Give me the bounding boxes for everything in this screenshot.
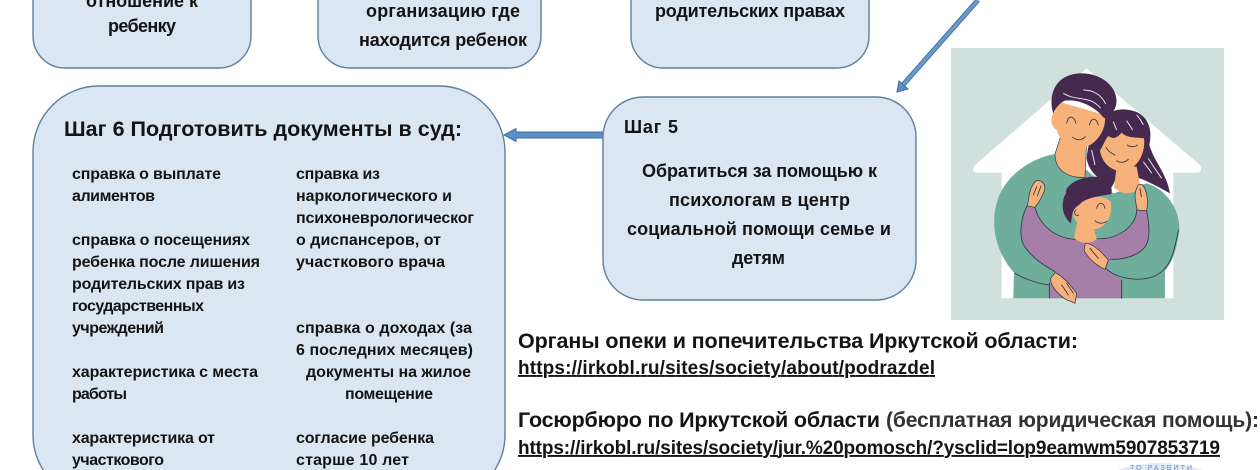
text block: right document list: справка из — [296, 166, 380, 183]
panel: top middle step box: организацию где — [366, 1, 520, 21]
arrow: step 5 to step 6 — [504, 128, 603, 142]
text block: left document list: алиментов — [72, 188, 155, 205]
text block: guardianship authorities: https://irkobl.ru/sites/society/about/podrazdel — [518, 358, 935, 379]
panel: top left step box: ребенку — [108, 16, 176, 36]
panel: step 5: Обратиться за помощью к — [642, 161, 878, 181]
panel: top middle step box — [318, 0, 541, 68]
icon: house — [973, 68, 1201, 298]
text block: left document list: родительских прав из — [72, 276, 245, 293]
figure: child shirt — [1021, 207, 1149, 298]
text block: left document list: ребенка после лишения — [72, 254, 260, 271]
heading: step 6: Шаг 6 Подготовить документы в суд: — [64, 117, 462, 141]
stamp: partially cropped seal — [1118, 463, 1202, 470]
text block: right document list: документы на жилое — [306, 364, 471, 381]
text block: left document list: участкового — [72, 452, 164, 469]
text block: state legal bureau: https://irkobl.ru/sites/society/jur.%20pomosch/?ysclid=lop9eamwm5907853719 — [518, 438, 1220, 459]
panel: top left step box — [33, 0, 251, 68]
text block: right document list — [296, 166, 474, 469]
figure: mother neck — [1114, 167, 1140, 193]
text block: state legal bureau: Госюрбюро по Иркутской области — [518, 408, 880, 432]
panel: top right step box: родительских правах — [655, 1, 845, 21]
text block: right document list: согласие ребенка — [296, 430, 434, 447]
text block: state legal bureau — [518, 408, 1259, 459]
text block: left document list: учреждений — [72, 320, 164, 337]
text block: guardianship authorities — [518, 329, 1078, 379]
panel: step 5 — [603, 97, 916, 300]
text block: left document list: справка о выплате — [72, 166, 221, 183]
panel: step 6 documents — [33, 86, 505, 470]
text block: left document list: характеристика от — [72, 430, 215, 447]
illustration: family in a house — [951, 48, 1224, 320]
figure: father neck — [1055, 138, 1087, 177]
text block: right document list: справка о доходах (за — [296, 320, 472, 337]
figure: mother hair — [1087, 109, 1170, 193]
panel: step 5: социальной помощи семье и — [627, 219, 891, 239]
text block: left document list: справка о посещениях — [72, 232, 250, 249]
text block: guardianship authorities: Органы опеки и попечительства Иркутской области: — [518, 329, 1078, 353]
figure: father face — [1051, 102, 1105, 148]
text block: left document list: государственных — [72, 298, 204, 315]
figure: hands — [1027, 181, 1045, 207]
figure: father body — [994, 154, 1179, 298]
text block: left document list: работы — [72, 386, 127, 403]
panel: step 5: детям — [732, 248, 785, 268]
text block: right document list: психоневрологическог — [296, 210, 474, 227]
text block: right document list: старше 10 лет — [296, 452, 409, 469]
text block: right document list: помещение — [345, 386, 433, 403]
panel: top middle step box: находится ребенок — [359, 30, 528, 50]
panel: step 5: психологам в центр — [669, 190, 850, 210]
text block: state legal bureau: (бесплатная юридическая помощь): — [886, 409, 1259, 432]
figure: child hair — [1063, 177, 1112, 223]
figure: child neck — [1074, 222, 1097, 243]
arrow: diagonal to step 5 — [897, 0, 978, 92]
text block: right document list: участкового врача — [296, 254, 445, 271]
figure: child face — [1073, 197, 1111, 229]
text block: right document list: 6 последних месяцев) — [296, 342, 473, 359]
figure: mother face — [1100, 133, 1144, 171]
text block: right document list: наркологического и — [296, 188, 452, 205]
panel: step 5: Шаг 5 — [624, 117, 678, 137]
figure: father hair — [1052, 73, 1117, 118]
panel: top right step box — [631, 0, 869, 68]
text block: right document list: о диспансеров, от — [296, 232, 441, 249]
text block: left document list — [72, 166, 260, 469]
text block: left document list: характеристика с места — [72, 364, 258, 381]
